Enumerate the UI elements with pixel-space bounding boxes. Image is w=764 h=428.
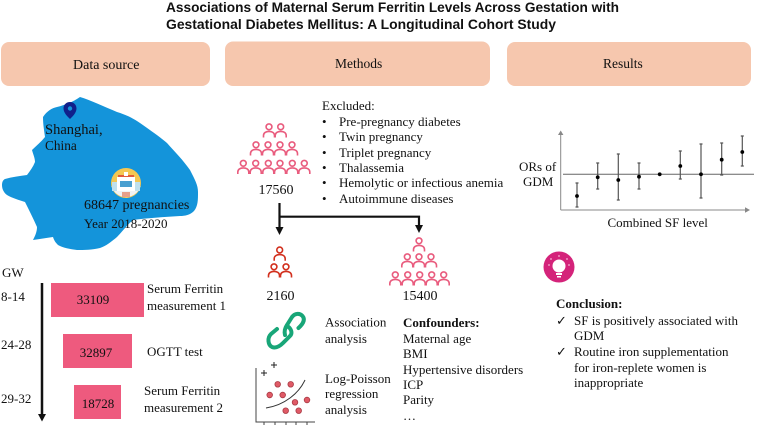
conclusion: Conclusion: (556, 296, 622, 311)
confounders list: Maternal age (403, 331, 471, 346)
conclusion: ✓ (556, 313, 567, 328)
bar: OGTT: 32897 (80, 345, 113, 360)
bar: measurement 2: Serum Ferritin (144, 383, 221, 398)
exclusion list: • (322, 191, 327, 206)
conclusion: inappropriate (574, 375, 644, 390)
bar: OGTT: OGTT test (147, 344, 203, 359)
confounders list: BMI (403, 346, 428, 361)
gestational week timeline (1, 265, 46, 422)
conclusion: Routine iron supplementation (574, 344, 729, 359)
icon: people group 2160 (268, 247, 292, 278)
bar: measurement 1: 33109 (77, 292, 109, 307)
total count: 17560 (258, 183, 294, 198)
conclusion: for iron-replete women is (574, 360, 706, 375)
icon: people group 17560 (238, 124, 310, 174)
gestational week timeline: GW (2, 265, 24, 280)
bar: measurement 1 (51, 281, 226, 317)
icon: hospital (111, 168, 141, 198)
confounders list: … (403, 408, 416, 423)
exclusion list: • (322, 160, 327, 175)
x axis label: Combined SF level (608, 215, 708, 230)
header: Methods: Methods (335, 56, 382, 71)
conclusion: SF is positively associated with (574, 313, 738, 328)
header: Results: Results (603, 56, 643, 71)
confounders list (403, 315, 523, 423)
title: Gestational Diabetes Mellitus: A Longitudinal Cohort Study (166, 17, 556, 32)
points (575, 150, 744, 198)
y axis label (519, 159, 557, 189)
map of Shanghai (2, 97, 198, 250)
gestational week timeline: 29-32 (1, 391, 31, 406)
count 2160: 2160 (266, 289, 294, 304)
icon: location pin (64, 102, 76, 119)
exclusion list: Autoimmune diseases (339, 191, 453, 206)
title (166, 0, 619, 32)
title: Associations of Maternal Serum Ferritin Levels Across Gestation with (166, 0, 619, 15)
header: Data source: Data source (73, 58, 139, 73)
association label (325, 315, 387, 346)
gestational week timeline: 24-28 (1, 337, 31, 352)
count 15400: 15400 (402, 289, 438, 304)
exclusion list: Twin pregnancy (339, 129, 423, 144)
error bars (576, 136, 744, 207)
header: Results (507, 42, 751, 86)
pregnancies label (84, 198, 189, 231)
bar: measurement 2: measurement 2 (144, 400, 223, 415)
exclusion list: Hemolytic or infectious anemia (339, 175, 503, 190)
pregnancies label: 68647 pregnancies (84, 198, 189, 213)
icon: people group 15400 (390, 238, 449, 286)
pregnancies label: Year 2018-2020 (84, 216, 168, 231)
exclusion list: • (322, 114, 327, 129)
bar: measurement 1: Serum Ferritin (147, 281, 224, 296)
axes (558, 130, 750, 213)
location label: China (45, 138, 77, 153)
header: Data source (1, 42, 210, 86)
regression label (325, 371, 391, 417)
exclusion list: Pre-pregnancy diabetes (339, 114, 461, 129)
location label: Shanghai, (45, 122, 103, 138)
exclusion list: Thalassemia (339, 160, 404, 175)
conclusion: ✓ (556, 344, 567, 359)
y axis label: GDM (523, 174, 554, 189)
confounders list: Confounders: (403, 315, 480, 330)
regression label: Log-Poisson (325, 371, 391, 386)
bar: measurement 1: measurement 1 (147, 298, 226, 313)
exclusion list: Excluded: (322, 98, 375, 113)
header: Methods (225, 42, 490, 86)
exclusion list: • (322, 145, 327, 160)
exclusion list (322, 98, 503, 206)
confounders list: Parity (403, 392, 435, 407)
y axis label: ORs of (519, 159, 557, 174)
bar: OGTT (63, 334, 203, 368)
exclusion list: • (322, 175, 327, 190)
location label (45, 122, 103, 153)
bar: measurement 2: 18728 (82, 396, 114, 411)
icon: lightbulb (544, 252, 574, 282)
confounders list: Hypertensive disorders (403, 362, 523, 377)
conclusion: GDM (574, 328, 605, 343)
exclusion list: Triplet pregnancy (339, 145, 432, 160)
conclusion (556, 296, 738, 390)
icon: scatter plot (256, 362, 315, 425)
association label: Association (325, 315, 387, 330)
exclusion list: • (322, 129, 327, 144)
arrow: timeline (38, 283, 46, 422)
chart: ORs of GDM forest plot (519, 130, 754, 230)
regression label: analysis (325, 402, 367, 417)
arrow: split flow (276, 203, 423, 235)
regression label: regression (325, 386, 379, 401)
association label: analysis (325, 331, 367, 346)
icon: chain link (268, 314, 304, 347)
confounders list: ICP (403, 377, 423, 392)
bar: measurement 2 (74, 383, 223, 419)
gestational week timeline: 8-14 (1, 289, 25, 304)
